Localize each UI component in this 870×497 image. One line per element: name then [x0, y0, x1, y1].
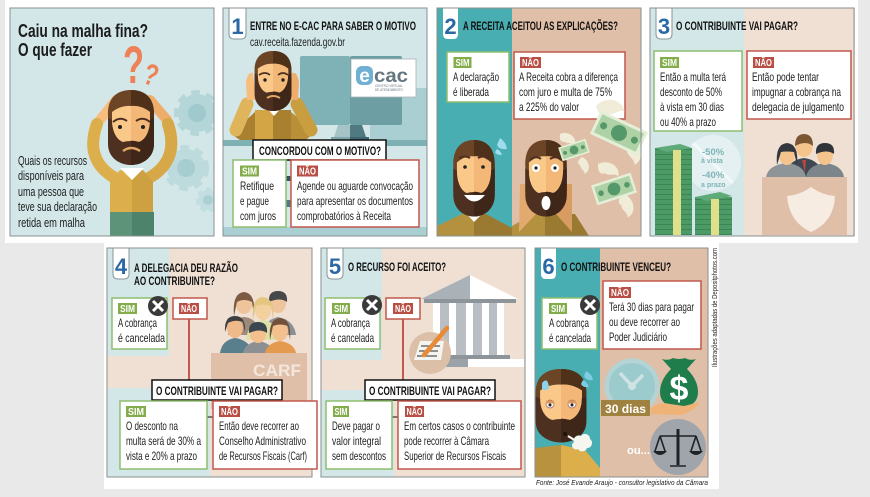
- box: nao: [291, 160, 419, 227]
- logo: e-cac: CENTRO VIRTUAL: [375, 84, 403, 88]
- logo: e-cac: [351, 59, 416, 97]
- box: sim: é cancelada: [331, 331, 374, 345]
- box: nao: com juro e multa de 75%: [519, 85, 612, 99]
- number tab: 3: 3: [658, 14, 670, 39]
- box: nao 2: Então deve recorrer ao: [219, 419, 299, 433]
- box: sim: A declaração: [453, 70, 499, 84]
- number tab: 5: 5: [329, 254, 341, 279]
- text block: intro: uma pessoa que: [18, 185, 84, 199]
- box: nao tag: NÃO: [395, 302, 411, 315]
- illustration: discount circle: à vista: [701, 158, 723, 165]
- illustration: worried man: [231, 51, 315, 140]
- box: nao: [603, 281, 701, 349]
- number tab: 1: 1: [231, 14, 244, 39]
- question box: [253, 140, 386, 160]
- box: nao: [747, 51, 851, 119]
- illustration: clock: [604, 358, 660, 414]
- title: [18, 21, 148, 60]
- title: Caiu na malha fina?: [18, 21, 148, 41]
- question box: [365, 380, 495, 400]
- box: nao: [514, 52, 625, 119]
- number tab: 6: 6: [542, 254, 555, 279]
- illustration credit: Ilustrações adaptadas de Depositphotos.com: [710, 248, 719, 367]
- panel: step 4: [107, 248, 317, 477]
- box: nao: A Receita cobra a diferença: [519, 70, 618, 84]
- box: nao 2: [398, 401, 521, 469]
- illustration: money bag and hand: [651, 358, 700, 415]
- heading: O CONTRIBUINTE VENCEU?: [561, 262, 671, 274]
- box: nao 2: NÃO: [221, 405, 238, 418]
- box: nao: Então pode tentar: [752, 70, 819, 84]
- panel: step 6: [535, 248, 708, 477]
- box: nao: NÃO: [611, 286, 629, 299]
- box: nao: para apresentar os documentos: [297, 194, 413, 208]
- box: nao 2: de Recursos Fiscais (Carf): [219, 449, 307, 463]
- heading: AO CONTRIBUINTE?: [134, 276, 215, 288]
- illustration: confused man: [93, 90, 171, 236]
- box: sim 2: [326, 401, 392, 469]
- question box: O CONTRIBUINTE VAI PAGAR?: [369, 386, 491, 398]
- source credit: Fonte: José Evande Araujo - consultor legislativo da Câmara: [536, 478, 708, 487]
- panel: step 3: [650, 8, 855, 236]
- box: sim: é cancelada: [549, 331, 591, 345]
- logo: e-cac: DE ATENDIMENTO: [375, 88, 404, 92]
- box: sim: com juros: [240, 209, 276, 223]
- box: nao 2: pode recorrer à Câmara: [404, 434, 489, 448]
- heading: A RECEITA ACEITOU AS EXPLICAÇÕES?: [463, 20, 618, 33]
- box: sim 2: Deve pagar o: [332, 419, 380, 433]
- text block: intro: Quais os recursos: [18, 154, 87, 168]
- logo: e-cac: e: [359, 66, 370, 87]
- number tab: 4: 4: [115, 254, 128, 279]
- illustration: flying money: [557, 100, 648, 219]
- icon: x mark: [362, 295, 382, 315]
- icon: document and pen: [409, 328, 451, 374]
- number tab: 5: [327, 248, 343, 279]
- box: nao 2: Conselho Administrativo: [219, 434, 306, 448]
- panel: step 5: [321, 248, 525, 477]
- box: sim: [112, 298, 167, 349]
- illustration: carf council: CARF: [253, 361, 301, 380]
- icon: question marks: ?: [123, 36, 144, 95]
- box: sim: Então a multa terá: [660, 70, 726, 84]
- number tab: 2: 2: [444, 14, 457, 39]
- illustration: money stacks: [655, 144, 732, 235]
- question box: CONCORDOU COM O MOTIVO?: [259, 146, 381, 158]
- box: sim: [542, 298, 597, 349]
- box: sim 2: SIM: [334, 407, 348, 418]
- illustration: discount circle: [685, 135, 741, 191]
- text block: intro: teve sua declaração: [18, 200, 97, 214]
- box: sim: à vista em 30 dias: [660, 100, 724, 114]
- number tab: 1: [229, 8, 246, 39]
- illustration: happy man: [437, 138, 512, 236]
- box: nao 2: [213, 401, 317, 469]
- box: sim 2: valor integral: [332, 434, 381, 448]
- box: nao: NÃO: [522, 56, 539, 69]
- box: sim: desconto de 50%: [660, 85, 722, 99]
- box: sim 2: multa será de 30% a: [126, 434, 201, 448]
- box: nao: NÃO: [299, 164, 316, 178]
- icon: question marks: ?: [139, 58, 163, 93]
- box: sim: SIM: [551, 304, 565, 315]
- box: sim: SIM: [662, 58, 677, 69]
- box: sim: A cobrança: [118, 316, 157, 330]
- box: nao: a 225% do valor: [519, 100, 579, 114]
- illustration: gears: [166, 90, 214, 212]
- box: sim: é cancelada: [118, 331, 165, 345]
- illustration: discount circle: a prazo: [701, 182, 726, 189]
- text: ou: ou...: [627, 445, 650, 457]
- box: sim: [325, 298, 380, 349]
- box: sim: [654, 51, 742, 131]
- question box: [152, 380, 282, 400]
- text: url: cav.receita.fazenda.gov.br: [250, 35, 345, 49]
- box: sim 2: [120, 401, 207, 469]
- text block: intro: retida em malha: [18, 216, 85, 230]
- box: sim: [447, 52, 509, 102]
- heading: ENTRE NO E-CAC PARA SABER O MOTIVO: [250, 21, 416, 33]
- box: sim: e pague: [240, 194, 269, 208]
- icon: x mark: [148, 296, 168, 316]
- box: sim: SIM: [242, 166, 257, 178]
- box: sim: Retifique: [240, 179, 274, 193]
- panel: capa: [10, 8, 218, 236]
- panel: step 2: [437, 8, 648, 236]
- text block: intro: disponíveis para: [18, 169, 84, 183]
- box: nao: Agende ou aguarde convocação: [297, 179, 413, 193]
- box: nao: Poder Judiciário: [609, 330, 667, 344]
- box: nao: NÃO: [755, 56, 772, 69]
- number tab: 2: [443, 8, 458, 39]
- illustration: discount circle: -50%: [702, 147, 725, 158]
- box: sim: SIM: [334, 304, 348, 315]
- question box: O CONTRIBUINTE VAI PAGAR?: [156, 386, 278, 398]
- box: sim: A cobrança: [549, 316, 589, 330]
- illustration: delegation at desk: [762, 134, 847, 235]
- box: nao tag: [173, 298, 207, 319]
- illustration: money bag and hand: $: [670, 370, 689, 408]
- box: nao 2: Em certos casos o contribuinte: [404, 419, 515, 433]
- heading: O CONTRIBUINTE VAI PAGAR?: [676, 21, 798, 33]
- number tab: 4: [113, 248, 129, 279]
- panel: step 1: [223, 8, 427, 236]
- box: nao: Terá 30 dias para pagar: [609, 300, 694, 314]
- box: nao: comprobatórios à Receita: [297, 209, 391, 223]
- heading: A DELEGACIA DEU RAZÃO: [134, 262, 238, 275]
- box: sim 2: O desconto na: [126, 419, 178, 433]
- illustration: monitor: [300, 56, 402, 141]
- illustration: courthouse: [421, 275, 524, 367]
- label: 30 dias: 30 dias: [605, 402, 646, 416]
- box: sim: [233, 160, 286, 227]
- illustration: exhausted man: [535, 369, 600, 477]
- box: sim: é liberada: [453, 85, 489, 99]
- illustration: shocked man: [512, 140, 589, 236]
- illustration: scales: [650, 419, 706, 475]
- connector: [402, 319, 404, 380]
- title: O que fazer: [18, 40, 92, 60]
- icon: x mark: [580, 295, 600, 315]
- box: sim: SIM: [456, 58, 470, 69]
- connector: [188, 319, 190, 380]
- number tab: 6: [541, 248, 556, 279]
- number tab: 3: [656, 8, 672, 39]
- heading: O RECURSO FOI ACEITO?: [348, 262, 446, 274]
- heading: [134, 262, 238, 288]
- box: nao tag: NÃO: [181, 302, 197, 315]
- box: nao 2: NÃO: [406, 405, 423, 418]
- illustration: discount circle: -40%: [702, 170, 725, 181]
- box: nao 2: Superior de Recursos Fiscais: [404, 449, 506, 463]
- box: sim: A cobrança: [331, 316, 370, 330]
- box: sim 2: sem descontos: [332, 449, 386, 463]
- box: sim: SIM: [120, 304, 135, 315]
- text block: intro: [18, 154, 97, 230]
- logo: e-cac: cac: [374, 66, 408, 87]
- illustration: carf council: [211, 291, 307, 409]
- box: nao: ou deve recorrer ao: [609, 315, 680, 329]
- box: sim 2: SIM: [128, 407, 144, 418]
- box: sim 2: vista e 20% a prazo: [126, 449, 197, 463]
- box: nao tag: [386, 298, 420, 319]
- box: sim: ou 40% a prazo: [660, 115, 716, 129]
